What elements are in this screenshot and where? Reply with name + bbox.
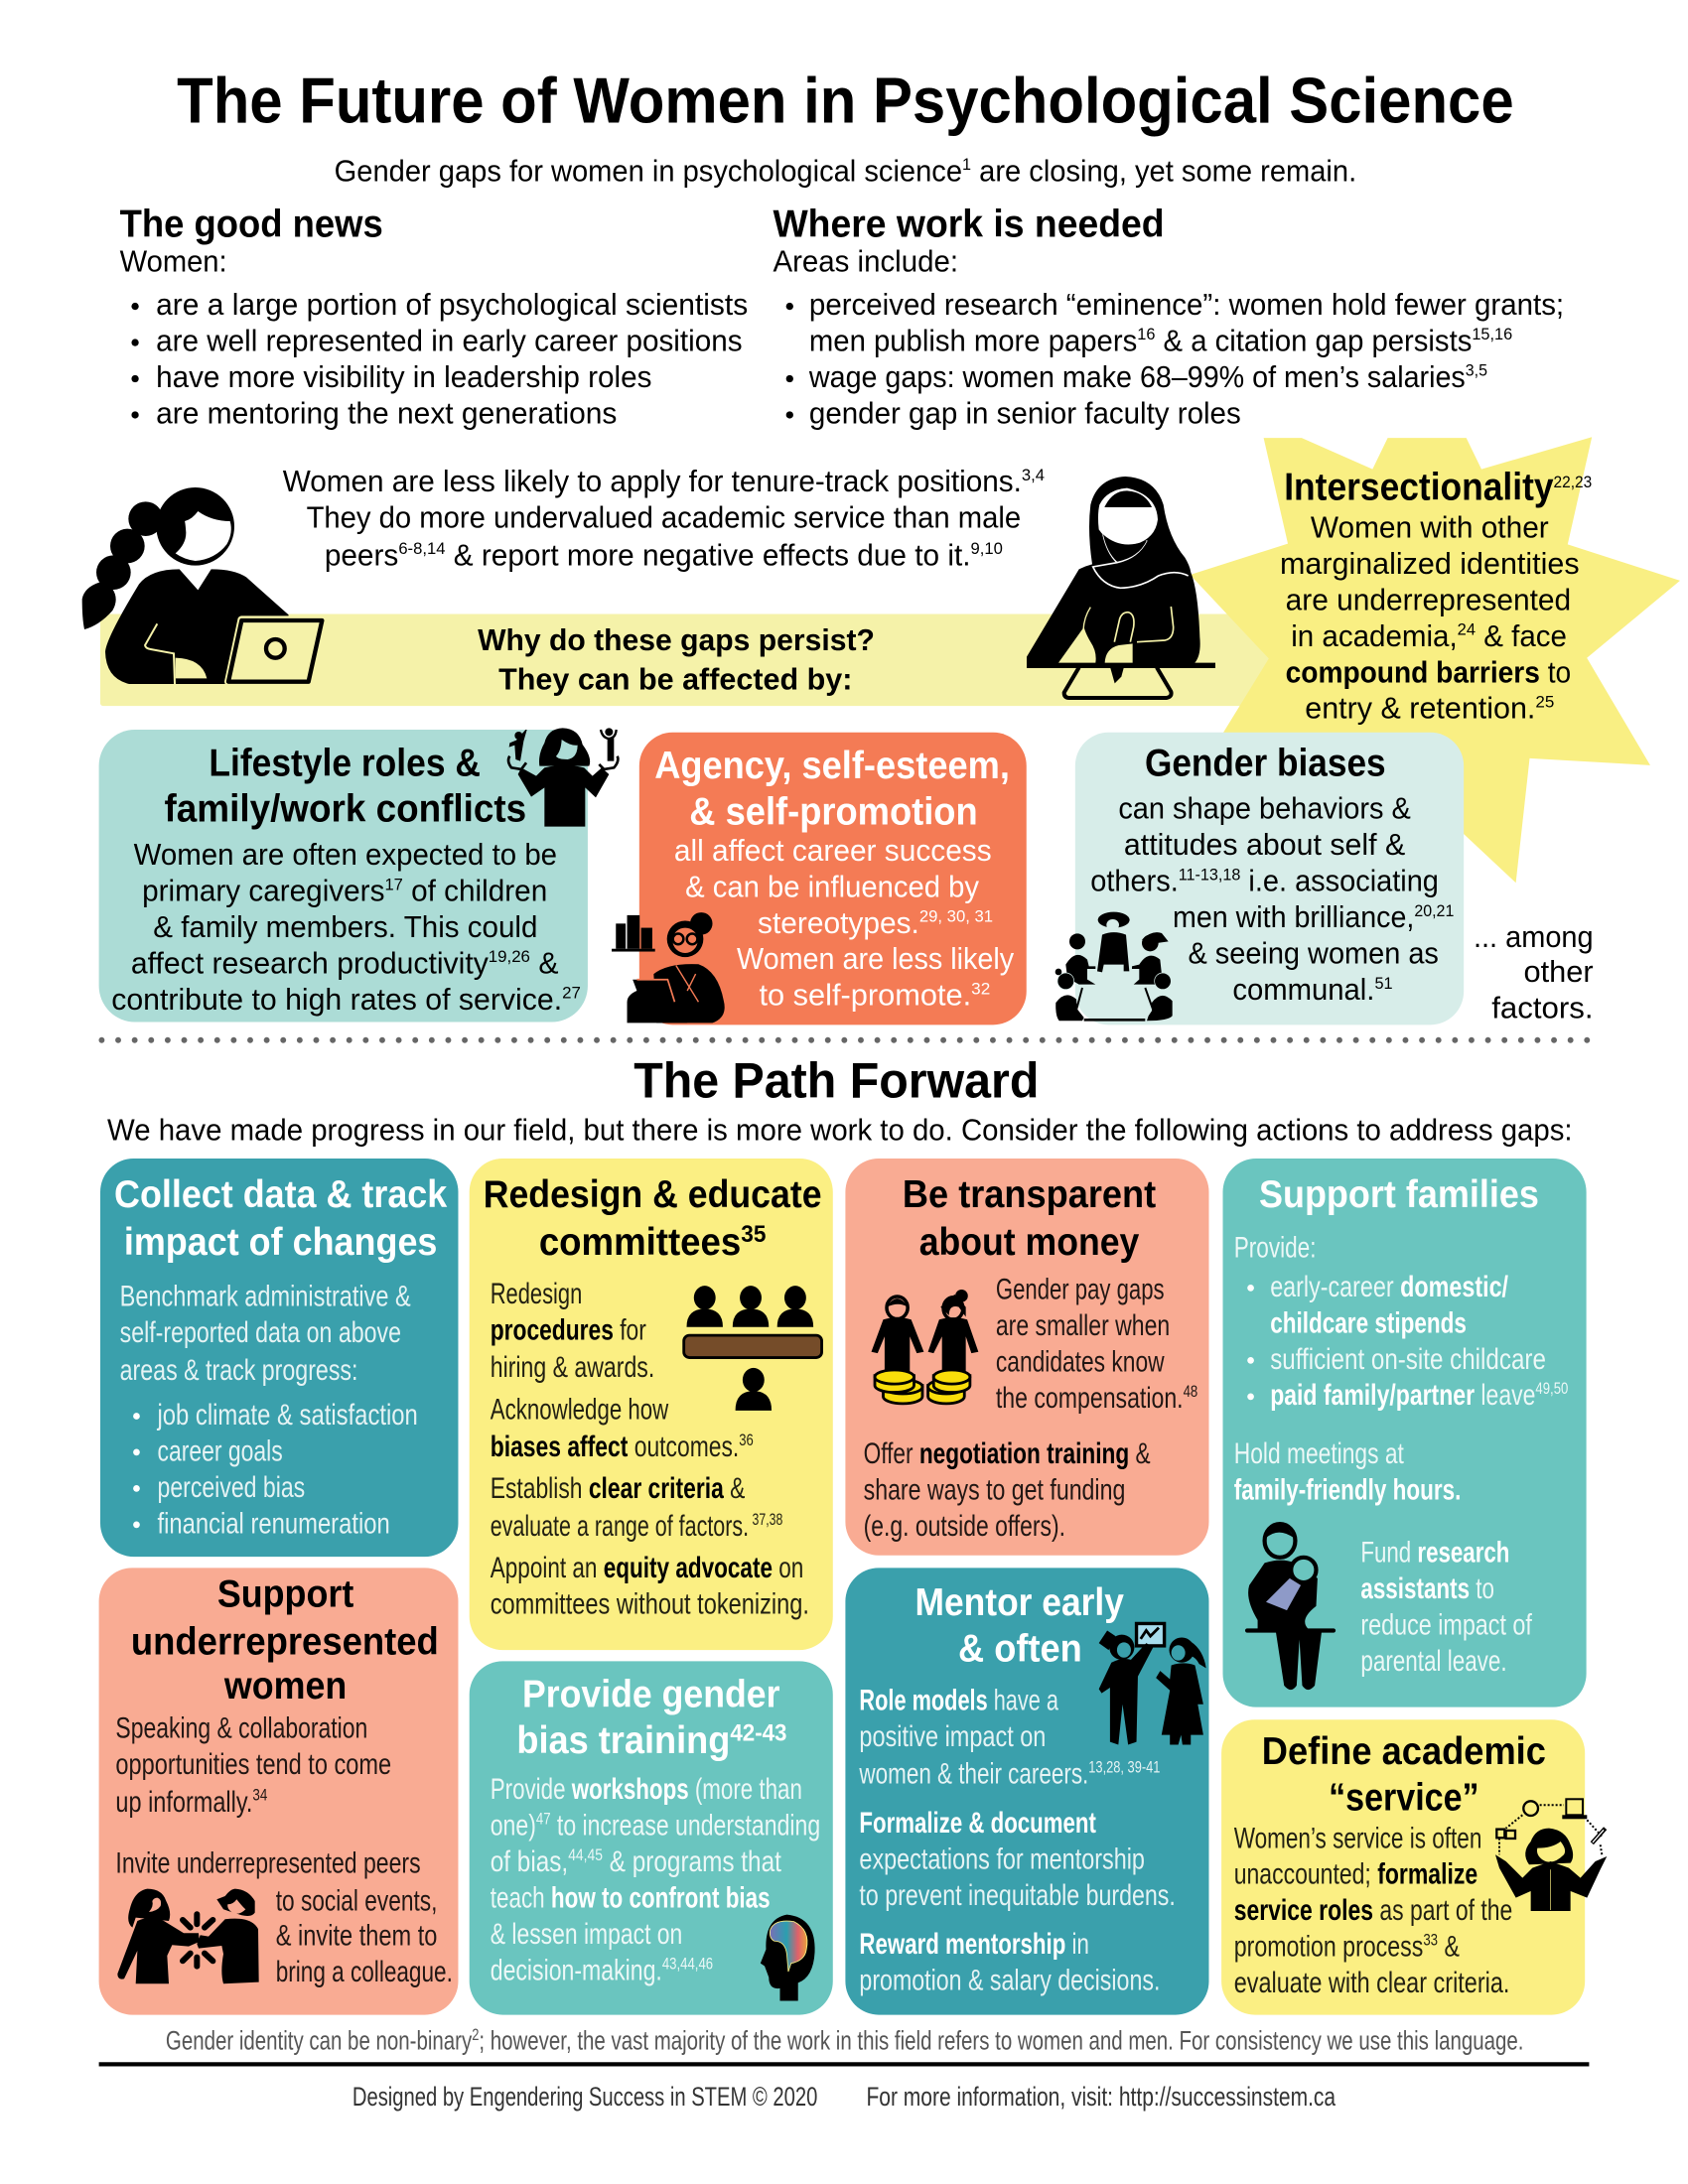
body: 47	[536, 1809, 551, 1828]
heading: women	[223, 1665, 347, 1707]
body	[1234, 1232, 1568, 1678]
bullet list: work needed: 3,5	[1466, 361, 1487, 380]
body: & family members. This could	[153, 911, 537, 944]
body	[674, 835, 1015, 1013]
icon: committee table	[684, 1286, 822, 1411]
paragraph: applying and service: 6-8,14	[398, 539, 445, 558]
icon: woman juggling tasks	[1495, 1799, 1607, 1911]
heading: Agency, self-esteem,	[654, 745, 1010, 787]
body: Women are often expected to be	[134, 839, 557, 872]
section: the good news	[120, 202, 748, 430]
heading: Provide gender	[522, 1674, 779, 1716]
starburst	[1191, 437, 1680, 883]
icon: woman balancing children on hands	[508, 728, 618, 827]
bullet list: good news	[131, 289, 748, 430]
panel: mentor early and often	[845, 1568, 1208, 2015]
body: 34	[252, 1786, 267, 1805]
footer link: For more information, visit: http://successinstem.ca	[866, 2082, 1336, 2112]
body: Offer negotiation training &	[864, 1437, 1151, 1470]
heading: the good news: The good news	[120, 202, 383, 245]
body: 48	[1184, 1382, 1197, 1401]
heading: the path forward: The Path Forward	[633, 1051, 1039, 1108]
body: decision-making.	[491, 1955, 710, 1987]
panel: gender biases	[1055, 733, 1464, 1024]
body: areas & track progress:	[120, 1354, 357, 1387]
body: to prevent inequitable burdens.	[859, 1879, 1176, 1912]
heading: Be transparent	[903, 1173, 1156, 1216]
body: service roles as part of the	[1234, 1894, 1512, 1927]
heading: committees	[539, 1221, 752, 1264]
bullet list: work needed	[786, 289, 1564, 430]
body: & lessen impact on	[491, 1918, 682, 1951]
text: among other factors: ... among	[1474, 921, 1594, 954]
heading: Define academic	[1262, 1730, 1546, 1773]
body	[115, 1711, 453, 1988]
body: (e.g. outside offers).	[864, 1510, 1065, 1543]
panel: support families	[1223, 1159, 1587, 1707]
body: Provide workshops (more than	[491, 1773, 802, 1806]
bullet list: financial renumeration	[158, 1507, 390, 1540]
heading	[903, 1173, 1156, 1264]
intersectionality text: 25	[1535, 693, 1554, 712]
intersectionality text: marginalized identities	[1280, 548, 1580, 581]
text: among other factors: other	[1523, 956, 1594, 989]
bullet list: work needed: & a citation gap persists	[1155, 325, 1472, 357]
body: 43,44,46	[662, 1954, 713, 1973]
heading: “service”	[1329, 1776, 1479, 1819]
footnote: 2	[472, 2025, 479, 2044]
heading: Support	[217, 1573, 353, 1616]
bullet list: good news: are a large portion of psychological scientists	[156, 289, 748, 322]
body: promotion & salary decisions.	[859, 1964, 1160, 1996]
body: 19,26	[489, 947, 530, 966]
heading: where work is needed: Where work is needed	[773, 202, 1165, 245]
body: 29, 30, 31	[919, 907, 993, 926]
heading: Intersectionality	[1284, 467, 1578, 509]
body: others.	[1090, 866, 1182, 898]
body: Benchmark administrative &	[120, 1281, 411, 1313]
body: men with brilliance,	[1173, 901, 1427, 934]
heading	[1262, 1730, 1546, 1819]
body: 32	[971, 979, 990, 998]
body: sufficient on-site childcare	[1270, 1343, 1546, 1376]
body: stereotypes.	[758, 907, 920, 940]
heading: underrepresented	[131, 1620, 439, 1663]
icon: woman at typewriter with books	[612, 912, 725, 1023]
intersectionality text: Women with other	[1311, 511, 1549, 544]
body: to self-promote.	[759, 980, 967, 1013]
text: among other factors: factors.	[1491, 992, 1594, 1024]
heading: Redesign & educate	[484, 1173, 822, 1216]
body: 20,21	[1414, 901, 1454, 920]
panel: agency	[612, 733, 1027, 1024]
banner text: They can be affected by:	[498, 663, 852, 696]
paragraph: applying and service	[283, 466, 1045, 572]
bullet list: job climate & satisfaction	[157, 1399, 418, 1432]
body: candidates know	[996, 1346, 1165, 1379]
panel: lifestyle roles	[99, 728, 618, 1023]
footnote: Gender identity can be non-binary	[166, 2026, 564, 2056]
body: can shape behaviors &	[1118, 793, 1411, 826]
body: early-career domestic/	[1270, 1271, 1508, 1303]
intersectionality text: are underrepresented	[1286, 584, 1571, 616]
bullet list: work needed: 15,16	[1472, 325, 1512, 343]
body	[859, 1684, 1176, 1996]
intersectionality text: 24	[1458, 620, 1476, 639]
body: 11-13,18	[1179, 865, 1240, 884]
body	[491, 1278, 809, 1621]
heading: bias training	[516, 1719, 745, 1762]
bullet list: work needed: perceived research “eminence”: women hold fewer grants;	[809, 289, 1564, 322]
paragraph: applying and service: 9,10	[971, 539, 1003, 558]
body: affect research productivity	[131, 947, 489, 980]
body: women & their careers.	[859, 1758, 1160, 1791]
body: promotion process	[1234, 1931, 1475, 1964]
bullet list: good news: are well represented in early career positions	[156, 325, 743, 357]
bullet list: career goals	[158, 1434, 283, 1467]
bullet list: work needed: 16	[1137, 325, 1155, 343]
body: Provide:	[1234, 1232, 1316, 1265]
body: 37,38	[749, 1510, 782, 1529]
body	[120, 1281, 411, 1387]
body: &	[530, 947, 558, 980]
body: attitudes about self &	[1124, 829, 1405, 862]
subheading: We have made progress in our field, but there is more work to do. Consider the following actions to address gaps:	[107, 1115, 1573, 1148]
body: assistants to	[1360, 1572, 1494, 1605]
icon: group at table	[1055, 912, 1173, 1022]
heading: Collect data & track	[114, 1173, 448, 1216]
body: 51	[1374, 974, 1393, 993]
heading: 42-43	[730, 1719, 786, 1746]
body	[491, 1773, 820, 1987]
bullet list: good news: are mentoring the next generations	[156, 397, 617, 430]
body: 44,45	[568, 1845, 603, 1864]
body: expectations for mentorship	[859, 1843, 1145, 1875]
body: Gender pay gaps	[996, 1274, 1165, 1306]
body: evaluate with clear criteria.	[1234, 1967, 1509, 1999]
body: Acknowledge how	[491, 1393, 669, 1426]
heading: impact of changes	[124, 1221, 437, 1264]
intro: Women:	[120, 246, 227, 279]
heading	[165, 742, 526, 831]
icon: woman with laptop	[82, 487, 322, 684]
heading: Gender biases	[1145, 742, 1386, 784]
paragraph: applying and service: 3,4	[1022, 466, 1045, 484]
subtitle: 1	[962, 155, 971, 174]
icon: mother holding baby	[1245, 1524, 1336, 1690]
body: of children	[403, 875, 547, 907]
body: 33	[1423, 1930, 1438, 1949]
body: 17	[384, 875, 403, 893]
body: Redesign	[491, 1278, 582, 1310]
body: to social events,	[276, 1884, 437, 1917]
icon: woman in hijab writing	[1027, 477, 1215, 698]
body: are smaller when	[996, 1309, 1170, 1342]
body: Hold meetings at	[1234, 1437, 1404, 1470]
icon: two women fist bump	[117, 1889, 259, 1983]
heading: & often	[958, 1627, 1082, 1670]
footer credit: Designed by Engendering Success in STEM © 2020	[352, 2082, 817, 2112]
body: & can be influenced by	[685, 871, 980, 903]
body	[864, 1274, 1197, 1543]
panel: define academic service	[1221, 1719, 1607, 2015]
panel: collect data	[100, 1159, 458, 1557]
banner text: Why do these gaps persist?	[478, 624, 875, 657]
heading: & self-promotion	[689, 790, 978, 833]
body: unaccounted; formalize	[1234, 1858, 1477, 1891]
subtitle: Gender gaps for women in psychological science	[335, 155, 985, 188]
body: biases affect outcomes.	[491, 1431, 771, 1463]
body: communal.	[1232, 974, 1379, 1007]
body: procedures for	[491, 1313, 646, 1346]
body: Role models have a	[859, 1684, 1058, 1716]
intersectionality text: in academia,	[1291, 620, 1461, 653]
body: 36	[739, 1431, 754, 1449]
body: & programs that	[603, 1845, 781, 1878]
banner text	[478, 624, 875, 696]
paragraph: applying and service: & report more negative effects due to it.	[445, 539, 971, 572]
body: teach how to confront bias	[491, 1882, 771, 1915]
intro: Areas include:	[773, 246, 958, 279]
body: evaluate a range of factors.	[491, 1510, 844, 1543]
body: parental leave.	[1360, 1645, 1507, 1678]
heading: 22,23	[1554, 473, 1592, 491]
body	[1090, 793, 1454, 1007]
body: family-friendly hours.	[1234, 1474, 1461, 1507]
heading: about money	[919, 1221, 1140, 1264]
intersectionality text: & face	[1476, 620, 1567, 653]
body: all affect career success	[674, 835, 992, 868]
body: reduce impact of	[1360, 1609, 1533, 1642]
paragraph: applying and service: They do more undervalued academic service than male	[307, 502, 1021, 535]
panel: be transparent about money	[845, 1159, 1208, 1556]
body: opportunities tend to come	[115, 1748, 391, 1781]
body: paid family/partner leave	[1270, 1379, 1553, 1412]
body: one)	[491, 1810, 549, 1843]
heading: family/work conflicts	[165, 788, 526, 831]
subtitle: are closing, yet some remain.	[971, 155, 1356, 188]
heading: 35	[741, 1221, 766, 1248]
bullet list: perceived bias	[158, 1471, 305, 1504]
body: bring a colleague.	[276, 1956, 453, 1988]
heading: Mentor early	[915, 1581, 1124, 1624]
intersectionality text: compound barriers to	[1286, 656, 1571, 689]
body: & invite them to	[276, 1919, 437, 1952]
body: hiring & awards.	[491, 1351, 654, 1384]
bullet list: work needed: gender gap in senior faculty roles	[809, 397, 1241, 430]
body: Reward mentorship in	[859, 1928, 1089, 1961]
heading	[915, 1581, 1124, 1670]
bullet list: work needed: wage gaps: women make 68–99% of men’s salaries	[809, 361, 1499, 394]
icon: man and woman on coins	[872, 1290, 978, 1404]
bullet list: good news: have more visibility in leadership roles	[156, 361, 651, 394]
body: 27	[562, 984, 581, 1003]
heading	[484, 1173, 822, 1264]
heading: Lifestyle roles &	[209, 742, 481, 784]
icon: head with colourful brain	[761, 1915, 815, 2001]
body: committees without tokenizing.	[491, 1588, 809, 1621]
bullet list: work needed: men publish more papers	[809, 325, 1147, 357]
heading: Support families	[1259, 1173, 1539, 1216]
body: of bias,	[491, 1845, 585, 1878]
body: positive impact on	[859, 1720, 1046, 1753]
icon: mentor and mentee at screen	[1099, 1623, 1206, 1744]
panel: support underrepresented women	[99, 1568, 458, 2015]
text: among other factors	[1474, 921, 1594, 1024]
body: to increase understanding	[551, 1810, 820, 1843]
heading	[516, 1674, 786, 1762]
panel: redesign committees	[470, 1159, 833, 1650]
body: up informally.	[115, 1786, 287, 1819]
body: Appoint an equity advocate on	[491, 1552, 803, 1584]
body: Speaking & collaboration	[115, 1711, 367, 1744]
paragraph: applying and service: Women are less likely to apply for tenure-track positions.	[283, 466, 1033, 498]
title: The Future of Women in Psychological Science	[177, 65, 1514, 136]
body: Establish clear criteria &	[491, 1472, 746, 1505]
body: Invite underrepresented peers	[115, 1847, 421, 1880]
intersectionality text	[1280, 467, 1592, 726]
body	[1234, 1822, 1512, 1999]
heading	[654, 745, 1010, 833]
banner arrow	[100, 614, 1277, 706]
bullet list	[133, 1399, 418, 1540]
body: &	[1438, 1931, 1460, 1964]
body: share ways to get funding	[864, 1474, 1125, 1507]
body: Fund research	[1360, 1537, 1509, 1570]
panel: gender bias training	[470, 1661, 833, 2015]
intersectionality text: entry & retention.	[1305, 693, 1533, 726]
body: self-reported data on above	[120, 1316, 401, 1349]
body: Formalize & document	[859, 1807, 1096, 1840]
body: 49,50	[1535, 1379, 1568, 1398]
body	[111, 839, 581, 1017]
heading	[131, 1573, 439, 1707]
body: the compensation.	[996, 1382, 1234, 1415]
section: where work is needed	[773, 202, 1564, 430]
body: i.e. associating	[1240, 866, 1439, 898]
body: contribute to high rates of service.	[111, 984, 561, 1017]
body: Women are less likely	[737, 943, 1015, 976]
body: primary caregivers	[142, 875, 388, 907]
heading	[114, 1173, 448, 1264]
body: & seeing women as	[1188, 938, 1439, 971]
paragraph: applying and service: peers	[325, 539, 399, 572]
body: Women’s service is often	[1234, 1822, 1481, 1854]
body: childcare stipends	[1270, 1306, 1467, 1339]
body: 13,28, 39-41	[1088, 1758, 1160, 1777]
